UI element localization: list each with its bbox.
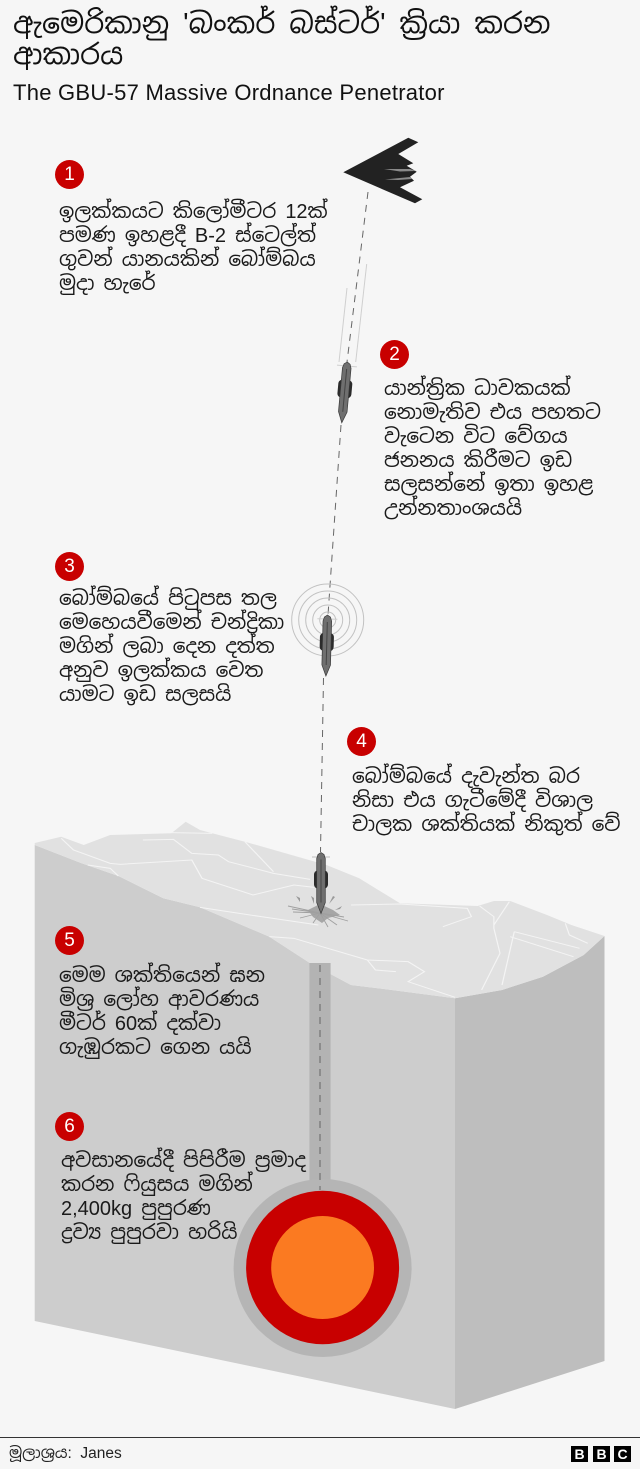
title	[13, 6, 550, 71]
bomb 4 impact	[312, 852, 330, 914]
step 1 text: මුදා හැරේ	[59, 273, 156, 295]
step 2	[380, 340, 601, 520]
source credit: මූලාශ්‍රය: Janes	[9, 1445, 122, 1462]
badge 3: 3	[64, 556, 75, 577]
badge 6	[55, 1112, 84, 1141]
step 1 text: පමණ ඉහළදී B-2 ස්ටෙල්ත්	[59, 225, 316, 247]
badge 4	[347, 727, 376, 756]
step 1	[55, 160, 328, 295]
penetration shaft	[309, 963, 331, 1193]
step 2 text: උන්නතාංශයයි	[384, 498, 522, 520]
badge 5: 5	[64, 930, 75, 951]
step 3 text: බෝම්බයේ පිටුපස තල	[59, 588, 277, 610]
step 6 text: කරන ෆියුසය මගින්	[61, 1174, 253, 1196]
step 6 text: අවසානයේදී පිපිරීම ප්‍රමාද	[61, 1150, 306, 1172]
badge 1	[55, 160, 84, 189]
badge 1: 1	[64, 164, 75, 185]
dashed flight path	[320, 192, 368, 1190]
step 6 text: ද්‍රව්‍ය පුපුරවා හරියි	[61, 1222, 237, 1244]
step 2 text: ජනනය කිරීමට ඉඩ	[384, 450, 572, 472]
step 1 text: ඉලක්කයට කිලෝමීටර 12ක්	[59, 201, 328, 223]
step 3 text: මගින් ලබා දෙන දත්ත	[59, 636, 275, 658]
badge 5	[55, 926, 84, 955]
terrain surface	[35, 822, 604, 998]
bomb 3 guided	[316, 615, 337, 676]
badge 2: 2	[389, 344, 400, 365]
step 5 text: මීටර් 60ක් දක්වා	[59, 1013, 221, 1035]
step 6 text: 2,400kg පුපුරණ	[61, 1198, 211, 1220]
step 1 text	[59, 198, 328, 295]
satellite guidance rings	[292, 584, 364, 656]
title: ආකාරය	[13, 39, 123, 71]
bomb 2 falling	[332, 361, 357, 424]
BBC logo: C	[617, 1446, 628, 1462]
impact burst	[288, 896, 348, 927]
badge 2	[380, 340, 409, 369]
step 4 text: නිසා එය ගැටීමේදී විශාල	[352, 790, 593, 812]
badge 4: 4	[356, 731, 367, 752]
step 6 text	[61, 1147, 306, 1244]
step 3 text: මෙහෙයවීමෙන් චන්ද්‍රිකා	[59, 612, 284, 634]
step 1 text: ගුවන් යානයකින් බෝම්බය	[59, 249, 316, 271]
step 4 text	[352, 763, 621, 836]
step 2 text: නොමැතිව එය පහතට	[384, 402, 601, 424]
step 2 text: සලසන්නේ ඉතා ඉහළ	[384, 474, 593, 496]
step 5	[55, 926, 265, 1059]
step 3	[55, 552, 284, 706]
step 5 text: මෙම ශක්තියෙන් ඝන	[59, 965, 265, 987]
step 4 text: චාලක ශක්තියක් නිකුත් වේ	[352, 814, 621, 836]
ground block right face	[455, 936, 604, 1409]
step 6	[55, 1112, 306, 1244]
badge 6: 6	[64, 1116, 75, 1137]
BBC logo: B	[574, 1446, 585, 1462]
step 2 text: වැටෙන විට වේගය	[384, 426, 568, 448]
blast chamber	[234, 1179, 412, 1357]
icon: B-2 stealth bomber	[343, 138, 422, 203]
ground block front face	[35, 845, 455, 1409]
BBC logo: B	[596, 1446, 607, 1462]
step 3 text	[59, 585, 284, 706]
step 2 text: යාන්ත්‍රික ධාවකයක්	[384, 378, 571, 400]
step 4 text: බෝම්බයේ දැවැන්ත බර	[352, 766, 580, 788]
step 2 text	[384, 375, 601, 520]
step 5 text	[59, 962, 265, 1059]
subtitle: The GBU-57 Massive Ordnance Penetrator	[13, 80, 445, 105]
step 4	[347, 727, 621, 836]
speed trail lines	[339, 264, 367, 362]
step 3 text: යාමට ඉඩ සලසයි	[59, 684, 231, 706]
step 5 text: ගැඹුරකට ගෙන යයි	[59, 1037, 252, 1059]
step 5 text: මිශ්‍ර ලෝහ ආවරණය	[59, 989, 259, 1011]
step 3 text: අනුව ඉලක්කය වෙත	[59, 660, 263, 682]
BBC logo	[571, 1446, 631, 1462]
title: ඇමෙරිකානු 'බංකර් බස්ටර්' ක්‍රියා කරන	[13, 8, 550, 40]
badge 3	[55, 552, 84, 581]
